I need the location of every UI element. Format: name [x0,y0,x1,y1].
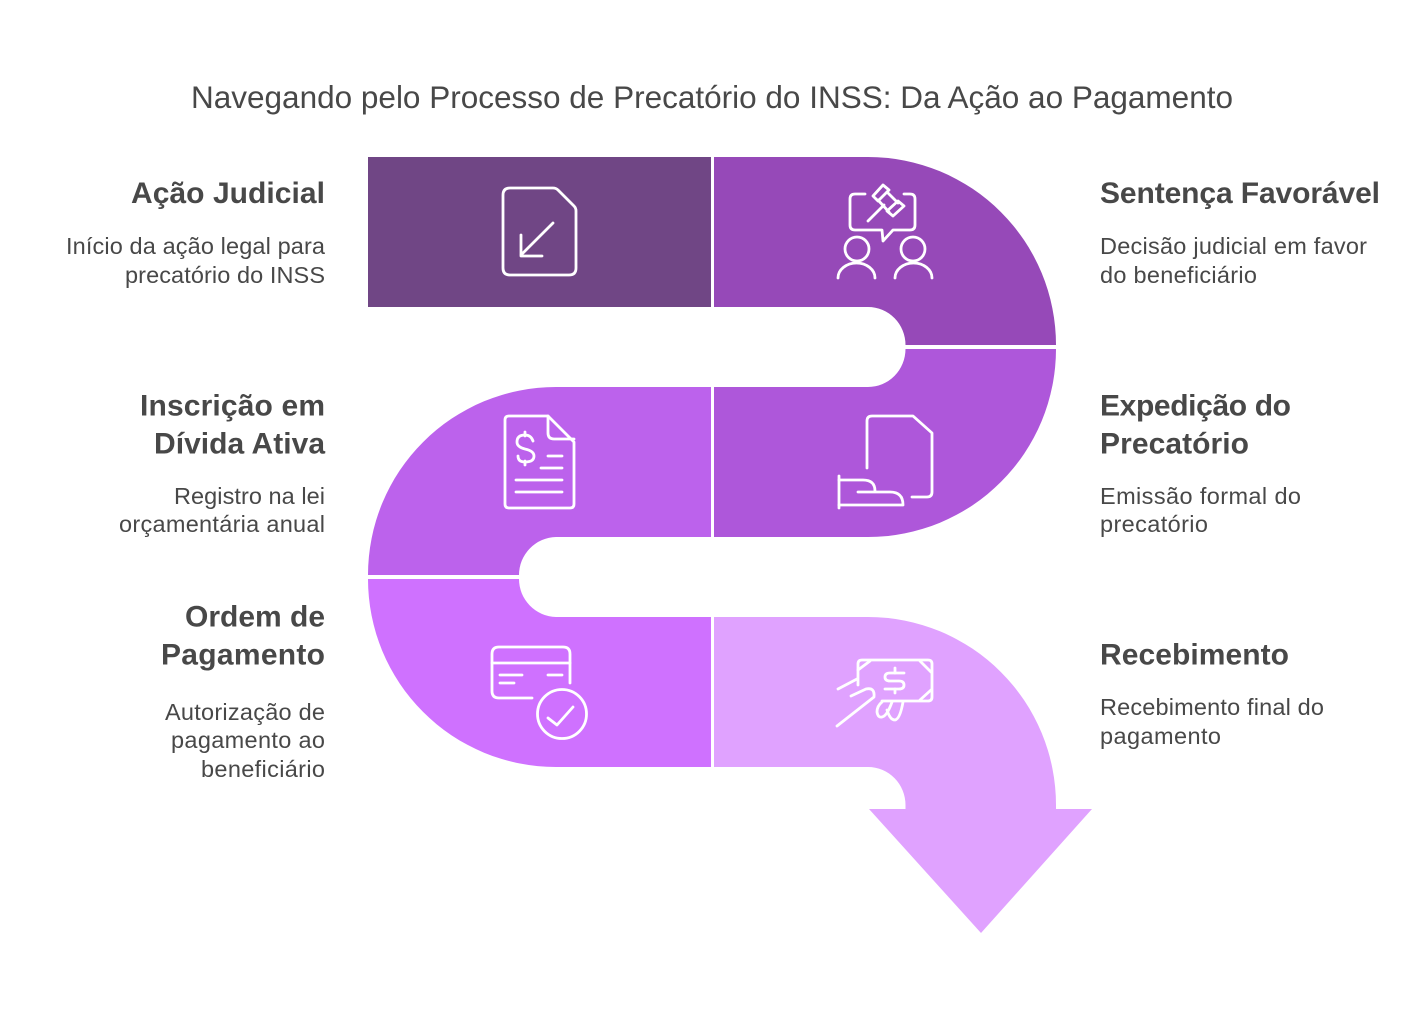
text: Expedição do Precatório: Precatório [1100,428,1249,460]
text: Expedição do Precatório: Expedição do [1100,390,1291,422]
text: Sentença Favorável [1100,177,1380,288]
text: Recebimento: Recebimento [1100,638,1289,672]
icon: document with arrow [503,188,576,275]
segment 2: Sentença Favorável [714,157,1056,345]
icon: hand receiving money [837,660,932,726]
segment 6: Recebimento with arrow head [714,617,1092,933]
text: Expedição do Precatório: precatório [1100,511,1208,537]
text: Expedição do Precatório: Emissão formal do [1100,483,1301,509]
text: Recebimento: Recebimento final do [1100,694,1324,720]
text: Ordem de Pagamento [161,600,325,782]
text: Inscrição em Dívida Ativa: Registro na lei [174,483,325,509]
text: Ação Judicial: precatório do INSS [125,262,325,288]
text: Recebimento: pagamento [1100,723,1221,749]
text: Ordem de Pagamento: Pagamento [161,638,325,672]
title: Navegando pelo Processo de Precatório do INSS: Da Ação ao Pagamento [191,79,1233,115]
segment 5: Ordem de Pagamento [368,579,711,767]
segment 4: Inscrição em Dívida Ativa [368,387,711,575]
icon: credit card with check [492,647,586,738]
icon: document over hand [839,416,932,508]
text: Sentença Favorável: Decisão judicial em favor [1100,233,1367,259]
text: Inscrição em Dívida Ativa: Inscrição em [140,390,325,422]
text: Inscrição em Dívida Ativa: orçamentária anual [119,511,325,537]
text: Ação Judicial: Ação Judicial [131,177,325,210]
segment 1: Ação Judicial [368,157,711,307]
text: Recebimento [1100,638,1324,749]
text: Ordem de Pagamento: pagamento ao [171,727,325,753]
text: Sentença Favorável: do beneficiário [1100,262,1257,288]
segment 3: Expedição do Precatório [714,349,1056,537]
text: Ordem de Pagamento: Ordem de [185,600,325,634]
text: Ordem de Pagamento: Autorização de [165,699,325,725]
text: Inscrição em Dívida Ativa [119,390,325,537]
text: Sentença Favorável: Sentença Favorável [1100,177,1380,210]
text: Ação Judicial [66,177,326,288]
icon: invoice document with dollar [505,416,574,508]
text: Expedição do Precatório [1100,390,1301,537]
icon: gavel in speech bubble with two people [838,185,932,278]
text: Ordem de Pagamento: beneficiário [201,756,325,782]
text: Inscrição em Dívida Ativa: Dívida Ativa [154,428,325,460]
text: Ação Judicial: Início da ação legal para [66,233,326,259]
serpentine path diagram [368,157,1092,933]
